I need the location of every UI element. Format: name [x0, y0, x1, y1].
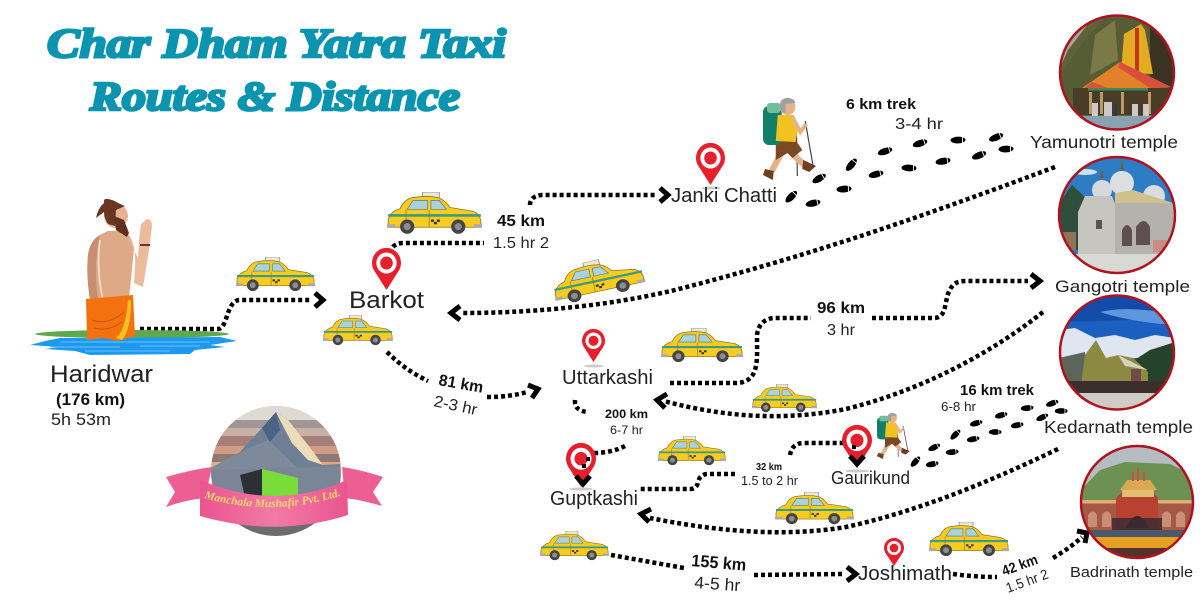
- taxis: [236, 192, 1009, 560]
- place and distance labels: 32 km: [756, 462, 782, 473]
- icon: sadhu at Haridwar: [86, 199, 152, 341]
- panel: Badrinath temple: Badrinath temple: [1070, 565, 1193, 581]
- title: Char Dham Yatra Taxi: [47, 20, 507, 66]
- place and distance labels: 3-4 hr: [895, 116, 944, 133]
- footprints: Yamunotri trek: [783, 131, 1014, 209]
- logo: Manchala Mushafir: Manchala Mushafir Pvt. Ltd.: [204, 488, 340, 509]
- place and distance labels: 16 km trek: [960, 382, 1035, 399]
- icon: hiker to Kedarnath: [877, 413, 910, 459]
- place and distance labels: Joshimath: [858, 563, 952, 585]
- place and distance labels: 42 km: [1000, 552, 1040, 580]
- place and distance labels: 6-7 hr: [610, 423, 643, 437]
- place and distance labels: Janki Chatti: [671, 185, 777, 207]
- place and distance labels: 81 km: [437, 372, 485, 397]
- logo: Manchala Mushafir: [166, 406, 383, 536]
- place and distance labels: 2-3 hr: [432, 393, 479, 419]
- icon: water and grass at Haridwar: [30, 330, 237, 355]
- label: Haridwar: (176 km): [56, 390, 125, 409]
- place and distance labels: Guptkashi: [550, 488, 638, 510]
- panel: Yamunotri temple: Yamunotri temple: [1030, 132, 1178, 152]
- place and distance labels: 1.5 hr 2: [493, 235, 549, 252]
- panel: Kedarnath temple: Kedarnath temple: [1044, 417, 1193, 437]
- dots and arrows over pins: [576, 445, 864, 484]
- routes: dotted taxi paths: [140, 167, 1087, 581]
- place and distance labels: Barkot: [349, 287, 424, 314]
- place and distance labels: 1.5 to 2 hr: [741, 473, 799, 488]
- place and distance labels: 6 km trek: [846, 96, 917, 113]
- panel: Yamunotri temple: [1030, 15, 1178, 152]
- panel: Gangotri temple: Gangotri temple: [1055, 277, 1190, 296]
- place and distance labels: 96 km: [817, 300, 865, 317]
- label: Haridwar: [50, 361, 153, 429]
- place and distance labels: Gaurikund: [831, 468, 910, 488]
- place and distance labels: 1.5 hr 2: [1004, 566, 1051, 596]
- place and distance labels: 155 km: [691, 551, 747, 575]
- label: Haridwar: 5h 53m: [51, 410, 111, 429]
- place and distance labels: 200 km: [605, 407, 648, 421]
- panel: Badrinath temple: [1070, 446, 1193, 581]
- panel: Gangotri temple: [1055, 156, 1190, 296]
- label: Haridwar: Haridwar: [50, 361, 153, 388]
- place and distance labels: [349, 96, 1051, 596]
- location pins: [372, 143, 904, 566]
- panel: Kedarnath temple: [1044, 295, 1193, 437]
- footprints: Kedarnath trek: [909, 398, 1068, 469]
- place and distance labels: 6-8 hr: [941, 399, 977, 414]
- place and distance labels: Uttarkashi: [562, 367, 653, 389]
- title: [47, 20, 507, 119]
- place and distance labels: 3 hr: [827, 322, 856, 339]
- icon: hiker to Yamunotri: [763, 98, 816, 180]
- place and distance labels: 45 km: [497, 213, 545, 230]
- title: Routes & Distance: [89, 73, 460, 119]
- place and distance labels: 4-5 hr: [694, 573, 741, 595]
